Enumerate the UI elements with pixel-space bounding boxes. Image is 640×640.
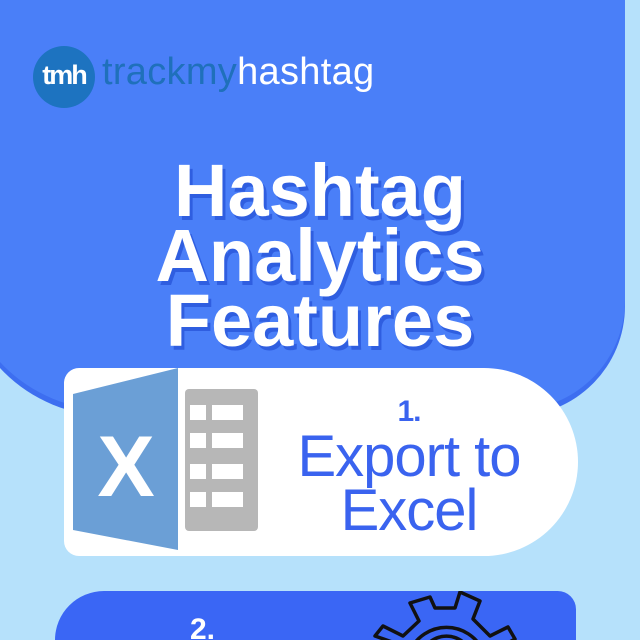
logo text: trackmyhashtag xyxy=(102,51,374,93)
icon: tmh circle xyxy=(33,46,95,108)
title: Analytics xyxy=(155,214,485,297)
text: feature 1 label: Export to xyxy=(297,424,521,489)
icon: excel: X xyxy=(97,419,155,515)
icon: tmh circle: tmh xyxy=(42,60,86,90)
panel: header background xyxy=(0,0,625,410)
logo xyxy=(33,46,374,108)
panel: feature 1 export to excel xyxy=(64,368,578,556)
text: feature 1 label: 1. xyxy=(397,395,421,428)
text: feature 1 label xyxy=(297,395,521,543)
title xyxy=(155,149,485,362)
icon: excel xyxy=(73,368,258,550)
text: feature 1 label: Excel xyxy=(341,478,477,543)
title: Features xyxy=(166,279,474,362)
title: Hashtag xyxy=(174,149,466,232)
icon: gear xyxy=(373,591,517,640)
panel: feature 2 xyxy=(55,591,576,640)
